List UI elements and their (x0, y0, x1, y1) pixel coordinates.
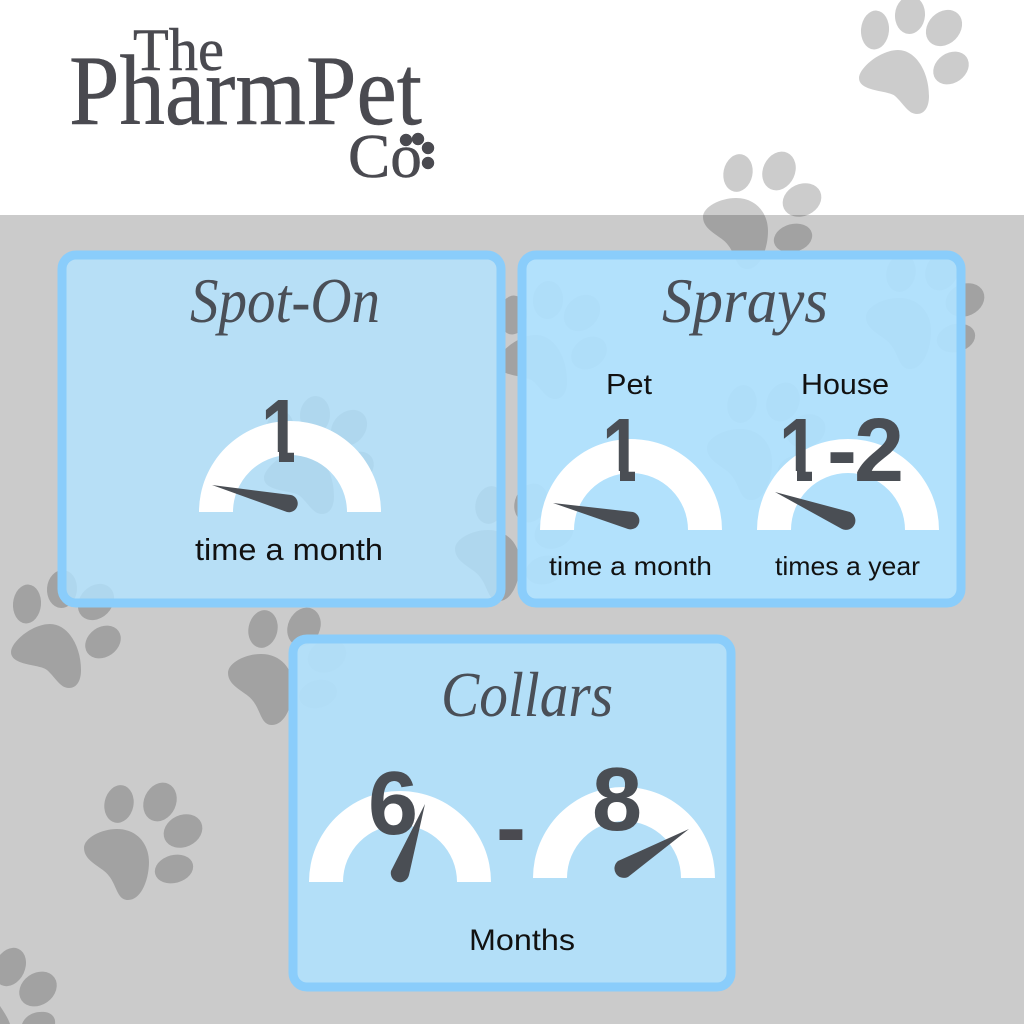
gauge: 8: 8 (592, 750, 642, 850)
gauge: 1 time a month: time a month (195, 532, 383, 567)
panel: Spot-On (62, 255, 501, 603)
gauge: 6 (309, 754, 491, 882)
label: Pet: Pet (606, 369, 652, 401)
gauge: house: - (827, 401, 857, 501)
gauge: 1 time a month (196, 400, 381, 560)
gauge: 6: 6 (368, 754, 418, 854)
logo word: Co: Co (348, 123, 422, 191)
gauge: pet: time a month (549, 551, 712, 581)
panel: Sprays (522, 255, 961, 603)
gauge: house (757, 401, 939, 581)
logo word: PharmPet: PharmPet (69, 35, 422, 146)
heading: Sprays: Sprays (662, 265, 828, 336)
panel: Collars (293, 639, 731, 987)
logo paw dots (400, 133, 434, 169)
logo word: The: The (133, 17, 224, 83)
gauge: house: 2 (854, 401, 904, 501)
heading: Collars: Collars (441, 659, 613, 730)
gauge: 8 (533, 750, 715, 878)
gauge: house: times a year (775, 551, 920, 581)
label: Months: Months (469, 924, 575, 957)
gray background band (0, 215, 1024, 1024)
heading: Spot-On: Spot-On (190, 265, 380, 336)
gauge: pet: 1 (602, 401, 642, 501)
logo (69, 17, 434, 191)
label: House: House (801, 369, 889, 401)
dash: - (496, 778, 526, 878)
gauge: pet (540, 419, 722, 576)
gauge: 1 time a month: 1 (261, 382, 301, 482)
gauge: house: 1 (779, 401, 819, 501)
